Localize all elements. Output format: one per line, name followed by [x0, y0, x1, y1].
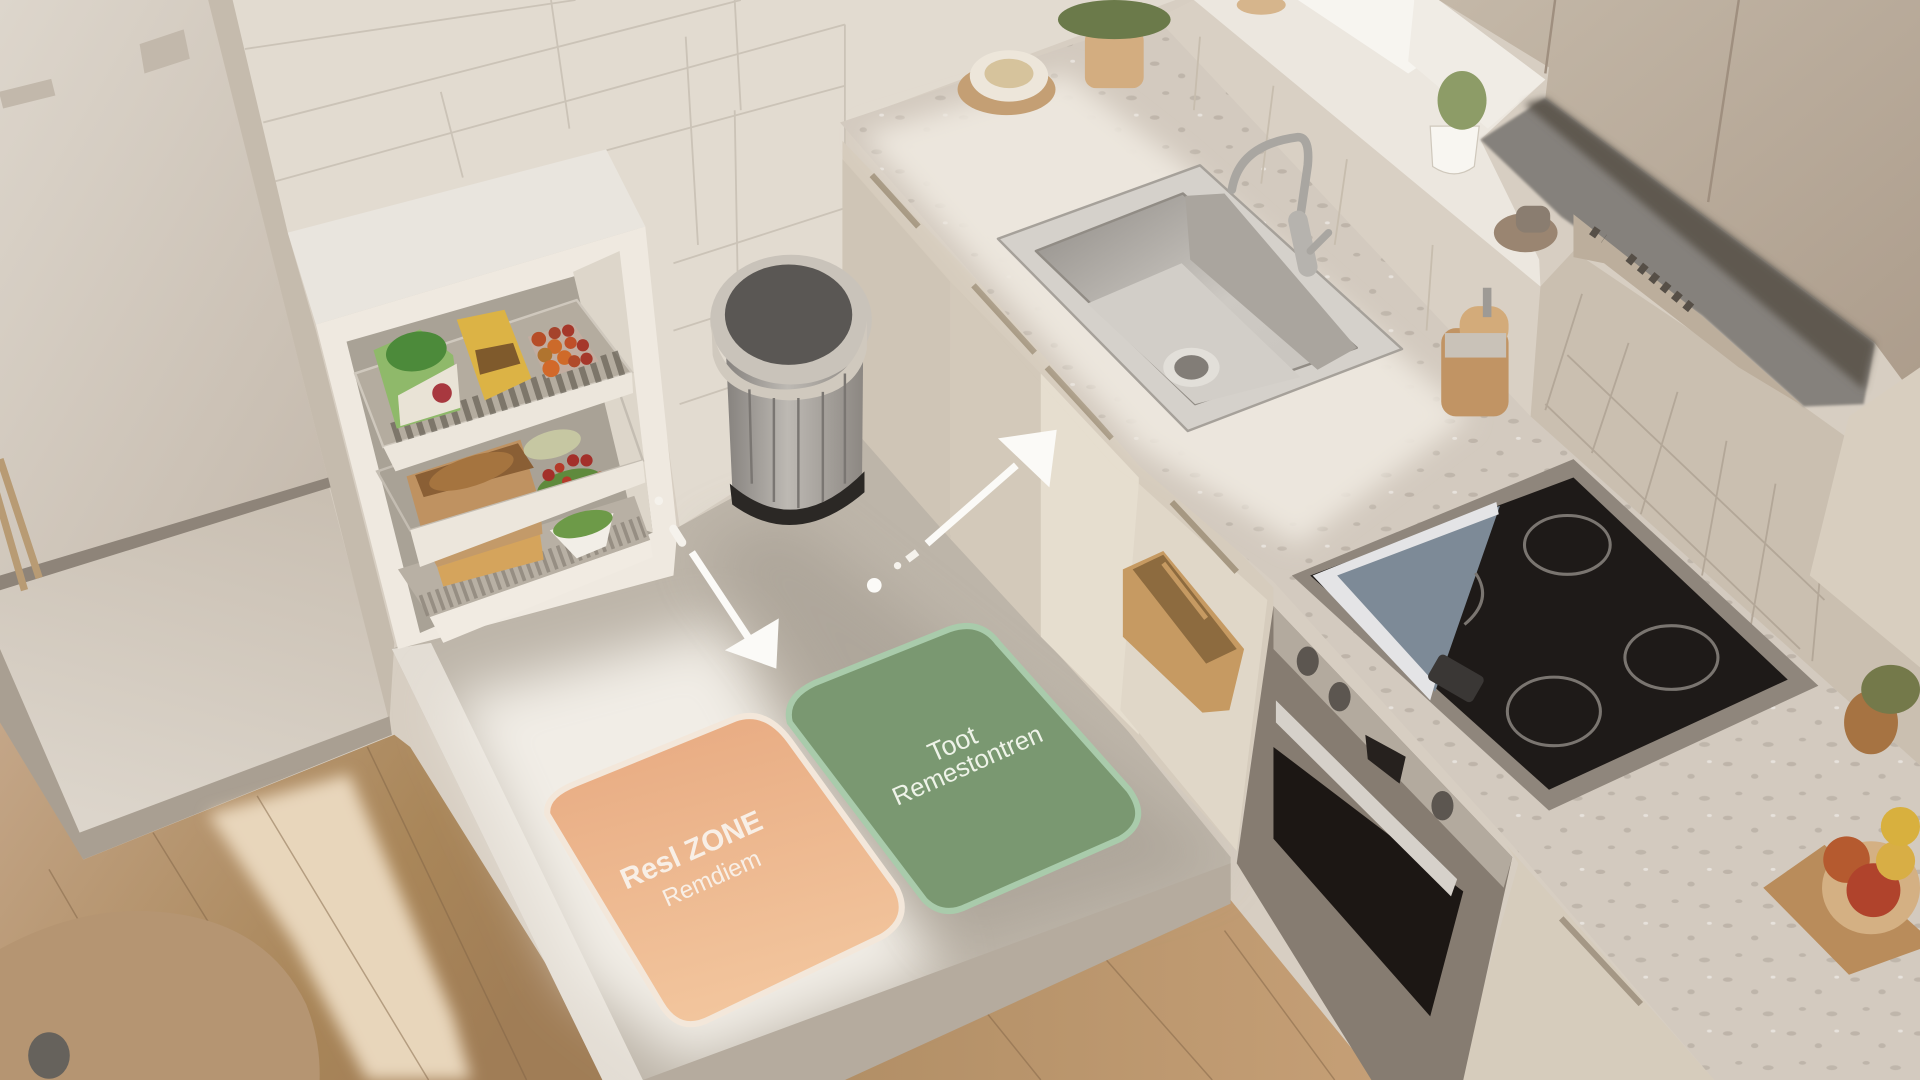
- white plant pot: [1430, 71, 1487, 174]
- top wire shelf: [355, 300, 633, 471]
- round table: [0, 911, 320, 1080]
- sink: [998, 165, 1402, 431]
- cooktop: [1292, 459, 1818, 811]
- trash can: [710, 255, 872, 525]
- middle wire shelf: [377, 389, 645, 567]
- pantry cabinet: [288, 149, 677, 649]
- small jar on sill: [1237, 0, 1286, 15]
- fridge: [0, 0, 394, 860]
- wooden dispenser bottle: [1441, 288, 1509, 416]
- middle shelf items: [407, 424, 609, 567]
- bottom shelf items: [437, 504, 616, 587]
- top shelf items: [373, 310, 599, 429]
- potted plant on counter: [1058, 0, 1171, 88]
- zone: tool (green): [789, 626, 1138, 911]
- label: tool: Toot: [923, 720, 982, 768]
- arrow: to tool zone / sink: [867, 430, 1057, 593]
- label: rest zone subtitle: Remdiem: [659, 845, 765, 913]
- zone: rest (orange): [547, 716, 902, 1024]
- label: tool subtitle: Remestontren: [888, 720, 1047, 811]
- window sill: [1194, 0, 1545, 287]
- wood floor: [0, 722, 1378, 1080]
- wicker wall basket: [1123, 551, 1244, 713]
- countertop: [840, 18, 1920, 1080]
- stone floor platform: [392, 429, 1231, 1080]
- arrow: shelf to rest zone: [654, 497, 779, 669]
- range hood: [1480, 98, 1875, 407]
- upper cabinets: [1439, 0, 1920, 667]
- oven: [1237, 606, 1512, 1080]
- faucet: [1232, 137, 1329, 267]
- fruit board: [1763, 807, 1920, 975]
- bottom wire shelf: [398, 496, 653, 643]
- cake plate: [958, 50, 1056, 115]
- right wall tiles: [1157, 0, 1920, 765]
- label: rest zone: Resl ZONE: [615, 804, 768, 896]
- hood side pot: [1494, 206, 1558, 252]
- base cabinets: [842, 141, 1273, 851]
- plant on right counter: [1844, 665, 1920, 754]
